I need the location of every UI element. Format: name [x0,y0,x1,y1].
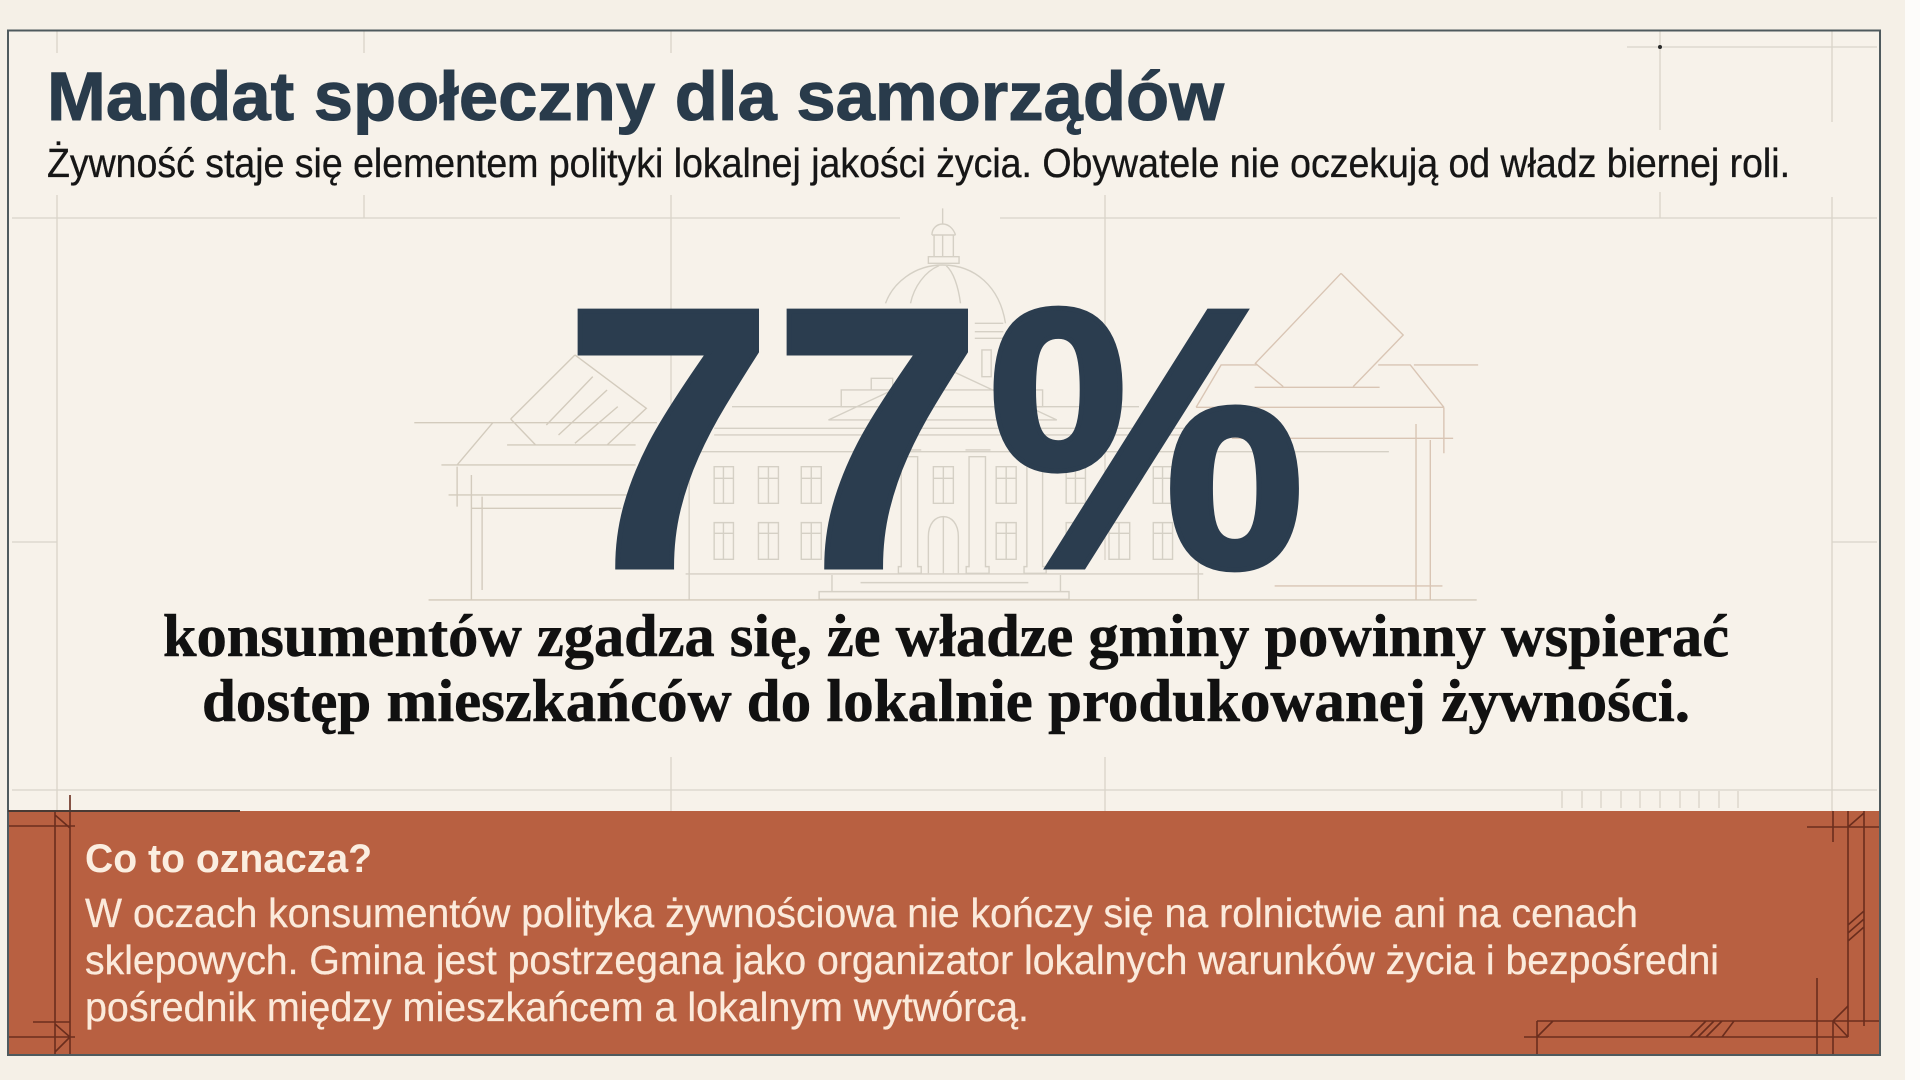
illustration: municipal building with ballot boxes [414,208,1478,600]
big statistic: 77%: 77 [564,230,982,646]
illustration: left ballot box [414,355,657,600]
panel body text: pośrednik między mieszkańcem a lokalnym wytwórcą. [85,984,1029,1030]
panel body text: W oczach konsumentów polityka żywnościowa nie kończy się na rolnictwie ani na cenach [85,890,1638,936]
big statistic: 77% [564,230,1306,646]
statement: konsumentów zgadza się, że władze gminy powinny wspierać [163,603,1729,669]
panel heading: Co to oznacza? [85,837,372,881]
title: Mandat społeczny dla samorządów [47,58,1224,135]
big statistic: 77%: % [987,230,1306,646]
statement: dostęp mieszkańców do lokalnie produkowanej żywności. [202,668,1690,734]
subtitle: Żywność staje się elementem polityki lokalnej jakości życia. Obywatele nie oczekują od władz biernej roli. [47,140,1790,186]
panel body text [85,890,1719,1030]
illustration: town hall [686,208,1389,600]
panel body text: sklepowych. Gmina jest postrzegana jako organizator lokalnych warunków życia i bezpośredni [85,937,1719,983]
illustration: right ballot box [1196,273,1478,600]
statement [163,603,1729,734]
panel corner blueprint lines [8,795,1879,1054]
panel: Co to oznacza [8,795,1880,1055]
